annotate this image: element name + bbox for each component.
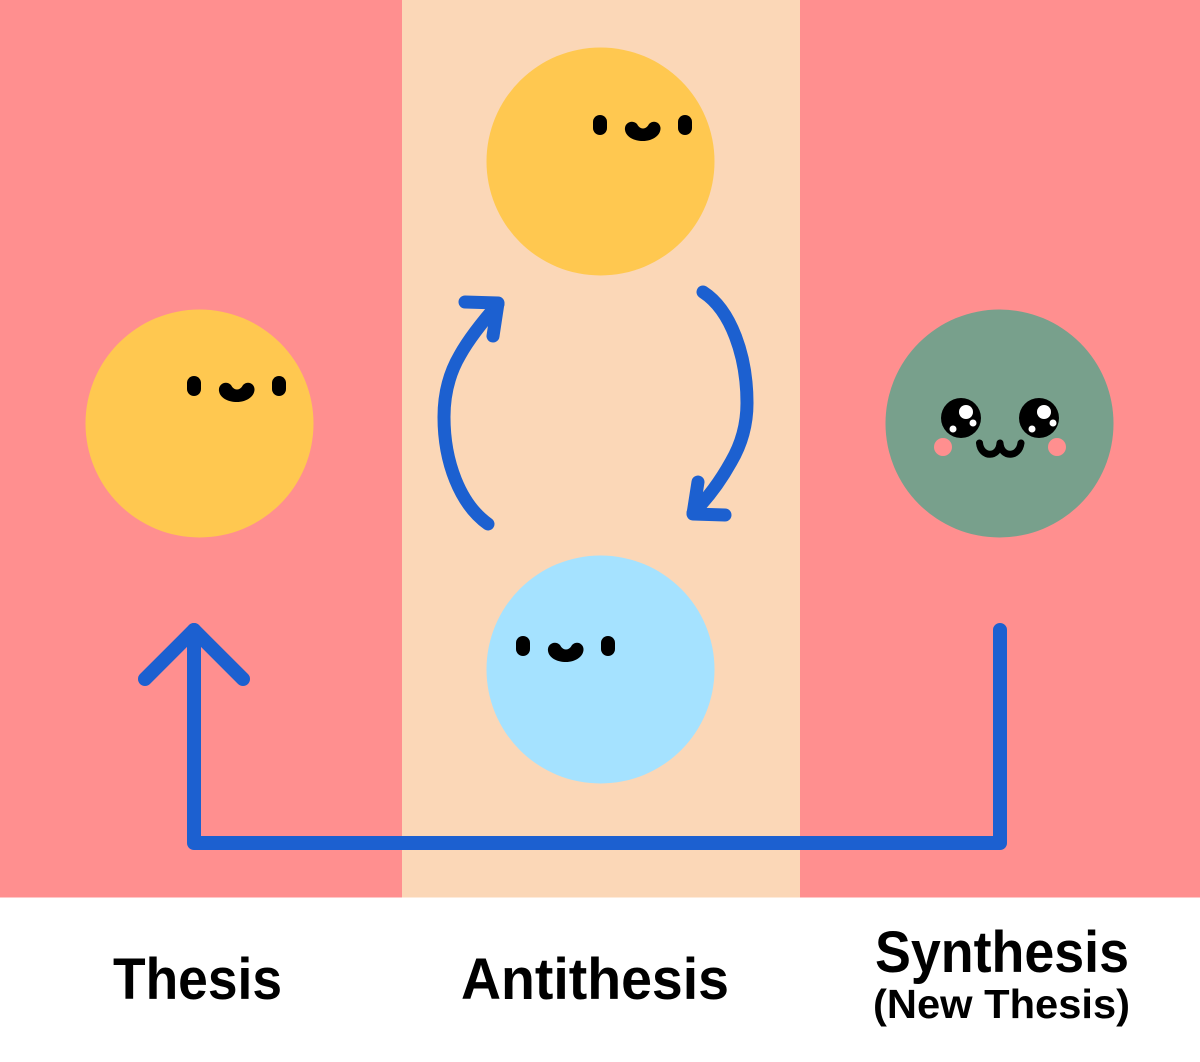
icon: yellow thesis face <box>86 310 314 538</box>
heading: Thesis: Thesis <box>113 947 282 1012</box>
icon: blue antithesis bottom face <box>486 556 714 784</box>
panel: thesis background <box>0 0 402 898</box>
arrow: thesis to antithesis, curving down on the right <box>693 292 747 515</box>
panel: synthesis background <box>800 0 1200 898</box>
arrow: synthesis returns to thesis <box>145 630 1000 843</box>
panel: antithesis background <box>402 0 800 898</box>
heading: Antithesis: Antithesis <box>461 947 729 1012</box>
arrow: antithesis to thesis, curving up on the left <box>444 302 498 524</box>
heading: Synthesis (New Thesis): (New Thesis) <box>873 981 1130 1027</box>
icon: yellow antithesis top face <box>486 48 714 276</box>
heading: Synthesis (New Thesis): Synthesis <box>875 920 1129 985</box>
icon: green synthesis kawaii face <box>886 310 1114 538</box>
heading: Synthesis (New Thesis) <box>873 920 1130 1027</box>
